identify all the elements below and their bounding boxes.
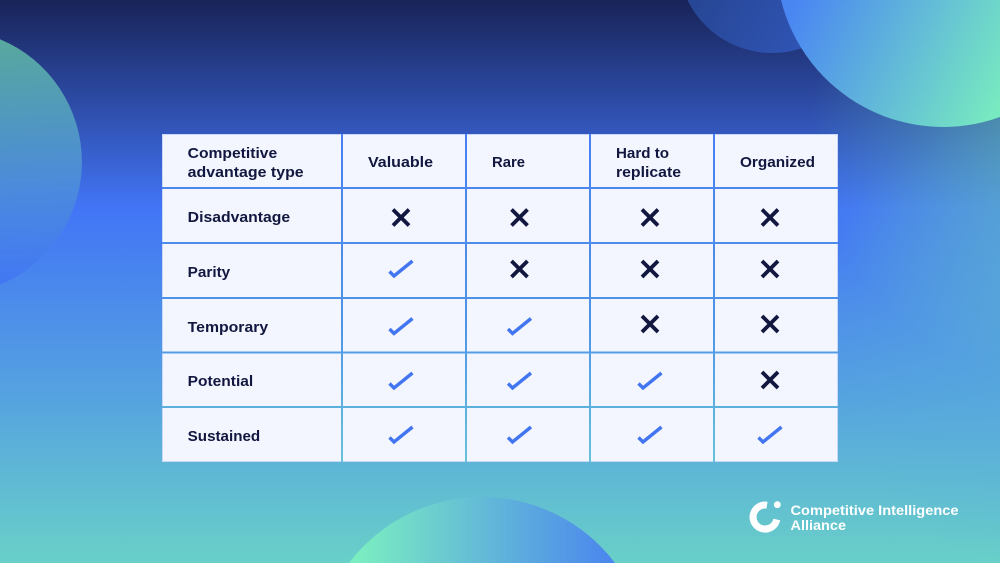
header row [188,145,815,181]
small circle top right [687,0,857,53]
header row: Valuable [368,154,433,171]
cross icons [393,210,778,388]
logo mark [753,501,781,529]
header row: advantage type [188,164,304,181]
header row: replicate [616,164,681,181]
row labels: Disadvantage [188,209,290,226]
header row: Rare [492,154,525,171]
logo text: Competitive Intelligence [790,503,959,518]
header row: Organized [740,154,815,171]
logo: Competitive Intelligence Alliance [753,501,959,533]
row labels: Temporary [188,319,269,336]
large circle top right [781,0,1000,127]
row labels: Sustained [188,428,260,445]
table grid [162,134,838,462]
check icons [390,261,782,442]
header row: Hard to [616,145,669,162]
logo text [790,503,959,533]
row labels [188,209,290,445]
right side glow [780,0,1000,563]
circle bottom [349,497,615,563]
logo text: Alliance [790,518,847,533]
row labels: Potential [188,373,253,390]
comparison table [162,134,838,462]
circle left edge [0,39,82,285]
row labels: Parity [188,264,231,281]
header row: Competitive [188,145,277,162]
